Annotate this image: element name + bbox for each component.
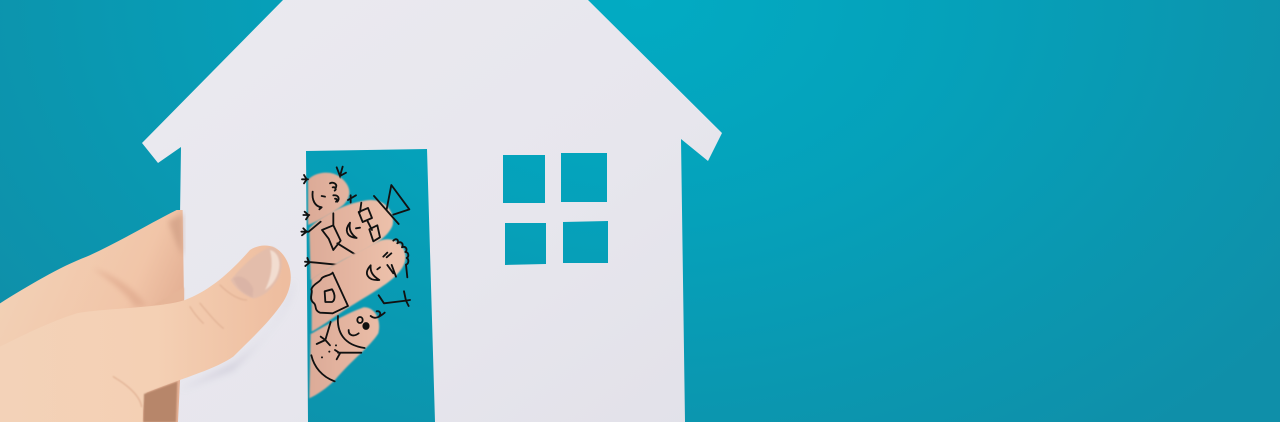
paper house [142, 0, 722, 422]
hand holding the house [0, 210, 293, 422]
thumb shadow on paper [180, 280, 293, 390]
fingers with family faces seen through the door [301, 167, 410, 398]
finger: father with hat and glasses [301, 185, 409, 280]
finger: mother with curly hair and apron [311, 239, 410, 332]
finger: baby [302, 167, 356, 225]
knuckle creases [113, 285, 247, 407]
thumb and palm [0, 245, 291, 422]
finger: child with bow [309, 307, 385, 398]
index finger behind paper and back of hand [0, 210, 184, 422]
thumbnail [231, 247, 282, 298]
